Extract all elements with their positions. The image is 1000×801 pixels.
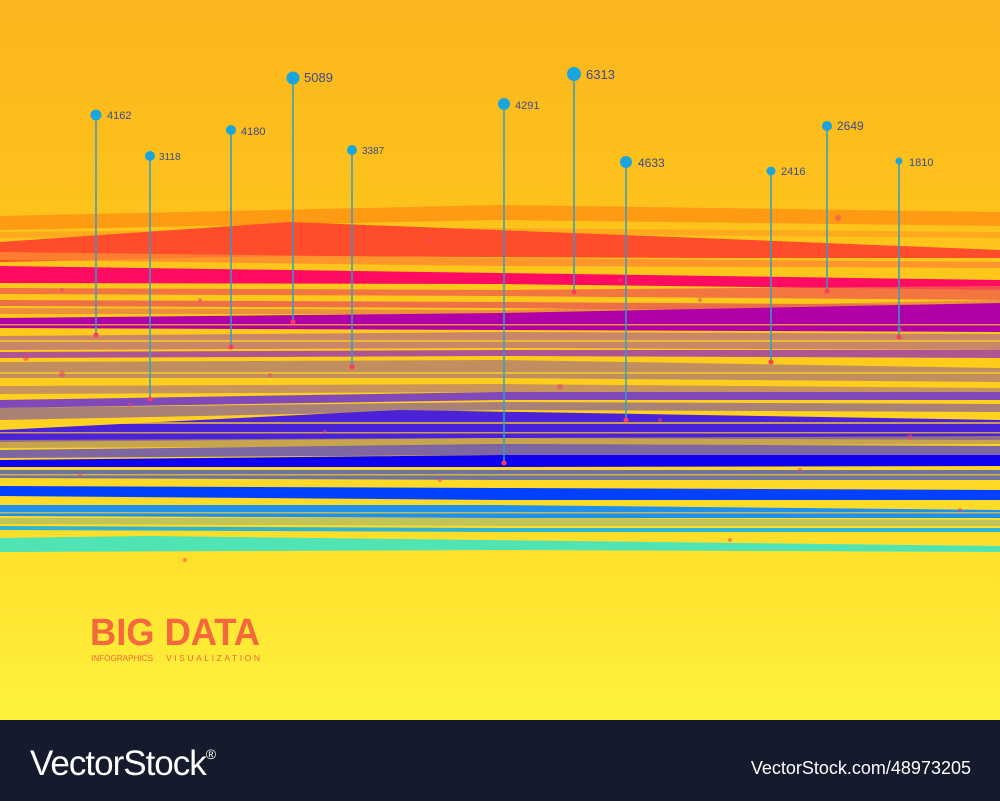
scattered data dots [23,215,962,562]
pin value labels: 2416 [781,166,805,178]
pin value labels: 3387 [362,146,385,157]
pin value labels [107,67,933,178]
title: BIG DATA: BIG DATA [90,612,260,654]
pin value labels: 4291 [515,100,539,112]
pin value labels: 3118 [159,152,181,163]
pin value labels: 4162 [107,110,131,122]
pin value labels: 4633 [638,156,665,170]
pin value labels: 6313 [586,67,615,82]
data pins [96,74,899,463]
footer: brand: ® [206,746,217,762]
pin value labels: 4180 [241,126,265,138]
footer: brand: VectorStock [30,744,206,783]
footer: image id: VectorStock.com/48973205 [751,758,971,778]
pin value labels: 5089 [304,70,333,85]
chart: data wave bands [0,205,1000,552]
pin value labels: 1810 [909,157,933,169]
title: BIG DATA: INFOGRAPHICS [91,653,153,663]
thin stripe texture [0,324,1000,514]
pin value labels: 2649 [837,119,864,133]
title: BIG DATA: VISUALIZATION [166,653,262,663]
footer bar [0,720,1000,801]
